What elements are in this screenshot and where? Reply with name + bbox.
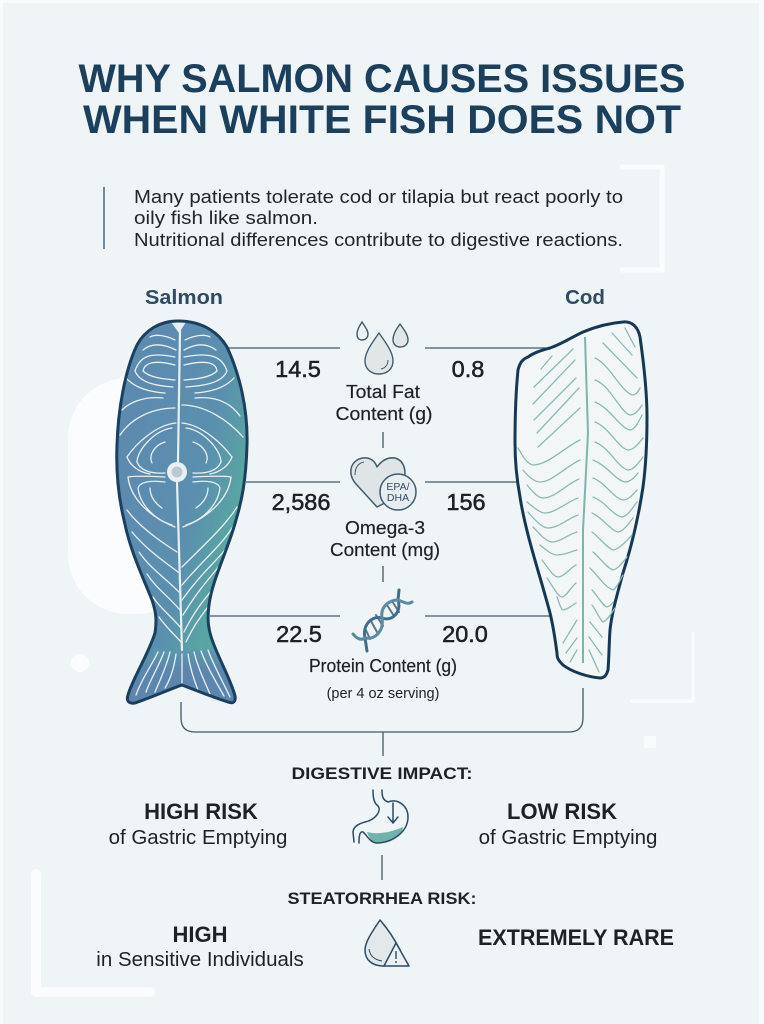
row 2 values: omega-3: 156 <box>446 489 486 515</box>
salmon steatorrhea risk: in Sensitive Individuals <box>96 948 304 971</box>
title <box>78 57 686 142</box>
row 2 values: omega-3 <box>272 489 486 515</box>
title: WHY SALMON CAUSES ISSUES <box>78 57 686 101</box>
row 1 values: total fat <box>275 356 484 382</box>
label: total fat content: Content (g) <box>336 404 432 424</box>
salmon illustration <box>117 321 247 703</box>
label: total fat content <box>336 382 432 424</box>
row 3 values: protein <box>276 621 488 647</box>
cod digestive risk: of Gastric Emptying <box>479 826 657 849</box>
label: omega-3 content: Content (mg) <box>330 540 440 560</box>
label: Salmon: Salmon <box>145 286 223 309</box>
salmon digestive risk: HIGH RISK <box>144 799 258 824</box>
cod steatorrhea risk: EXTREMELY RARE <box>478 925 674 950</box>
row 3 values: protein: 20.0 <box>442 621 488 647</box>
title: WHEN WHITE FISH DOES NOT <box>83 98 681 142</box>
row 2 values: omega-3: 2,586 <box>272 489 330 515</box>
icon: heart with EPA/DHA badge <box>351 458 416 510</box>
label: protein content: Protein Content (g) <box>309 656 457 676</box>
label: omega-3 content <box>330 518 440 560</box>
salmon digestive risk: of Gastric Emptying <box>109 826 287 849</box>
cod illustration <box>515 322 647 678</box>
icon: heart with EPA/DHA badge: EPA/ <box>386 481 410 493</box>
salmon digestive risk <box>109 799 287 849</box>
heading: steatorrhea risk: STEATORRHEA RISK: <box>288 889 476 908</box>
intro text block: oily fish like salmon. <box>134 208 318 228</box>
label: protein content <box>309 656 457 702</box>
label: total fat content: Total Fat <box>346 382 420 402</box>
salmon steatorrhea risk <box>96 922 304 971</box>
intro text block <box>103 187 623 250</box>
icon: fat droplets <box>357 322 408 374</box>
row 1 values: total fat: 14.5 <box>275 356 321 382</box>
icon: stomach <box>353 790 408 843</box>
salmon steatorrhea risk: HIGH <box>172 922 228 947</box>
label: protein content: (per 4 oz serving) <box>327 686 439 702</box>
cod digestive risk: LOW RISK <box>507 799 617 824</box>
icon: droplet with warning <box>365 920 409 966</box>
label: Cod: Cod <box>565 286 605 309</box>
intro text block: Many patients tolerate cod or tilapia but react poorly to <box>134 187 623 207</box>
row 1 values: total fat: 0.8 <box>452 356 484 382</box>
icon: DNA helix <box>353 590 412 651</box>
intro text block: Nutritional differences contribute to digestive reactions. <box>134 230 623 250</box>
row 3 values: protein: 22.5 <box>276 621 322 647</box>
label: omega-3 content: Omega-3 <box>345 518 425 538</box>
icon: heart with EPA/DHA badge: DHA <box>387 492 409 504</box>
heading: digestive impact: DIGESTIVE IMPACT: <box>292 764 472 783</box>
cod digestive risk <box>479 799 657 849</box>
connector lines <box>181 348 583 880</box>
